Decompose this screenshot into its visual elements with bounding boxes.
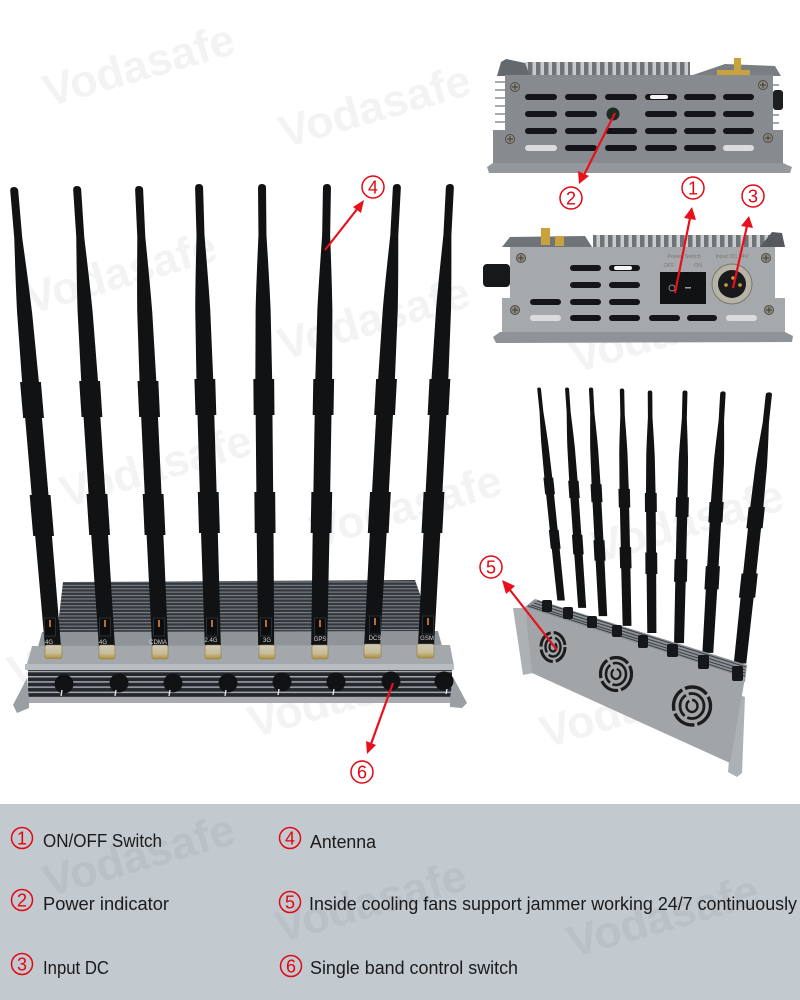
legend item 5: 5 bbox=[285, 892, 295, 912]
antenna windows bbox=[44, 616, 434, 636]
arrow: to number 2 bbox=[578, 113, 615, 184]
arrow: to number 4 bbox=[325, 200, 364, 250]
left bracket bbox=[513, 608, 533, 675]
legend item 4: 4 bbox=[285, 828, 295, 848]
light slots bbox=[525, 95, 754, 151]
band labels: 3G bbox=[263, 638, 271, 644]
watermarks: Vodasafe bbox=[54, 414, 257, 518]
on/off switch bbox=[660, 272, 706, 304]
vent slots bbox=[525, 94, 754, 151]
arrow: to number 3 bbox=[733, 216, 753, 288]
callout 4 bbox=[362, 176, 384, 198]
watermarks bbox=[2, 13, 789, 758]
band labels: CDMA bbox=[149, 640, 167, 646]
arrow: to number 5 bbox=[502, 580, 557, 650]
antennas bbox=[4, 184, 460, 648]
front fins bbox=[28, 670, 452, 697]
legend item 1: ON/OFF Switch bbox=[43, 830, 162, 851]
callout 5 bbox=[480, 556, 502, 578]
band labels: GPS bbox=[314, 637, 326, 643]
fan 3 bbox=[674, 687, 710, 725]
watermarks: Vodasafe bbox=[564, 279, 767, 383]
legend item 2 bbox=[12, 890, 169, 914]
legend item 6: 6 bbox=[286, 956, 296, 976]
fin lines bbox=[528, 601, 746, 676]
band labels bbox=[45, 636, 434, 646]
knobs on top bbox=[542, 600, 743, 681]
arrow: to number 1 bbox=[675, 207, 696, 293]
panel print: Input DC 24V bbox=[715, 254, 749, 260]
callout 6: 6 bbox=[357, 762, 367, 782]
power indicator bbox=[606, 108, 620, 120]
callout 1: 1 bbox=[688, 178, 698, 198]
screws bbox=[510, 254, 774, 314]
callout 6 bbox=[351, 761, 373, 783]
legend item 6: Single band control switch bbox=[310, 957, 518, 978]
callout 3: 3 bbox=[748, 186, 758, 206]
fan 2 bbox=[600, 658, 632, 690]
band labels: 4G bbox=[99, 640, 107, 646]
callout 3 bbox=[742, 185, 764, 207]
body bbox=[493, 75, 783, 164]
callout 2: 2 bbox=[566, 188, 576, 208]
band labels: DCS bbox=[369, 636, 381, 642]
watermarks: Vodasafe bbox=[586, 469, 789, 573]
legend item 1 bbox=[12, 828, 162, 851]
legend item 1: 1 bbox=[17, 828, 27, 848]
legend watermarks bbox=[37, 803, 764, 968]
panel: bottom device side with switch and DC input bbox=[483, 228, 793, 343]
base plate bbox=[493, 332, 793, 343]
panel: legend bbox=[0, 803, 800, 1000]
watermarks: Vodasafe bbox=[242, 644, 445, 748]
top fins bbox=[525, 62, 690, 76]
body bbox=[502, 247, 785, 333]
DC input connector bbox=[712, 264, 752, 304]
legend item 3: 3 bbox=[17, 954, 27, 974]
callout 5: 5 bbox=[486, 558, 496, 578]
top fins bbox=[525, 599, 747, 682]
bottom strip bbox=[28, 697, 452, 703]
legend item 5: Inside cooling fans support jammer working 24/7 continuously bbox=[309, 893, 798, 914]
light slots bbox=[530, 266, 757, 321]
panel print: ON bbox=[694, 263, 702, 269]
panel print: OFF bbox=[664, 263, 675, 269]
callout 4: 4 bbox=[368, 178, 378, 198]
antenna connector bbox=[717, 58, 750, 76]
legend item 4 bbox=[280, 828, 377, 852]
panel: main jammer front view bbox=[4, 184, 467, 713]
panel: jammer rear view with fans bbox=[513, 388, 777, 777]
knob ticks bbox=[61, 689, 447, 696]
watermarks: Vodasafe bbox=[19, 220, 222, 324]
side knob bbox=[773, 90, 783, 110]
top fins bbox=[593, 235, 770, 247]
legend watermarks: Vodasafe bbox=[561, 864, 764, 968]
legend item 4: Antenna bbox=[310, 831, 377, 852]
callout 1 bbox=[682, 177, 704, 199]
base plate bbox=[487, 163, 792, 173]
legend item 3 bbox=[12, 954, 109, 978]
heatsink top bbox=[57, 580, 434, 634]
watermarks: Vodasafe bbox=[37, 13, 240, 117]
silver lip bbox=[25, 664, 454, 670]
fan 1 bbox=[541, 632, 565, 662]
side fins bbox=[495, 82, 779, 123]
band labels: 2.4G bbox=[204, 638, 218, 644]
mounting feet bbox=[13, 678, 29, 713]
control knobs bbox=[54, 672, 454, 694]
legend item 3: Input DC bbox=[43, 957, 109, 978]
watermarks: Vodasafe bbox=[534, 654, 737, 758]
band labels: GSM bbox=[420, 636, 434, 642]
rear antennas bbox=[534, 388, 777, 663]
connectors bbox=[45, 644, 434, 659]
vent slots bbox=[530, 265, 717, 321]
panel: top device side with power indicator bbox=[487, 58, 792, 173]
band labels: 4G bbox=[45, 640, 53, 646]
rear panel bbox=[525, 607, 745, 763]
screws bbox=[506, 80, 772, 144]
side knob bbox=[483, 264, 510, 287]
watermarks: Vodasafe bbox=[304, 454, 507, 558]
callout 2 bbox=[560, 187, 582, 209]
legend item 2: 2 bbox=[17, 890, 27, 910]
top plate bbox=[38, 631, 442, 647]
watermarks: Vodasafe bbox=[2, 594, 205, 698]
arrow: to number 6 bbox=[366, 683, 393, 754]
watermarks: Vodasafe bbox=[273, 54, 476, 158]
antenna connectors bbox=[541, 228, 564, 246]
watermarks: Vodasafe bbox=[272, 266, 475, 370]
panel print: Power Switch bbox=[667, 254, 701, 260]
legend watermarks: Vodasafe bbox=[269, 849, 472, 953]
legend item 2: Power indicator bbox=[43, 893, 169, 914]
panel print bbox=[664, 254, 749, 269]
legend watermarks: Vodasafe bbox=[37, 803, 240, 907]
right bracket bbox=[728, 693, 745, 777]
